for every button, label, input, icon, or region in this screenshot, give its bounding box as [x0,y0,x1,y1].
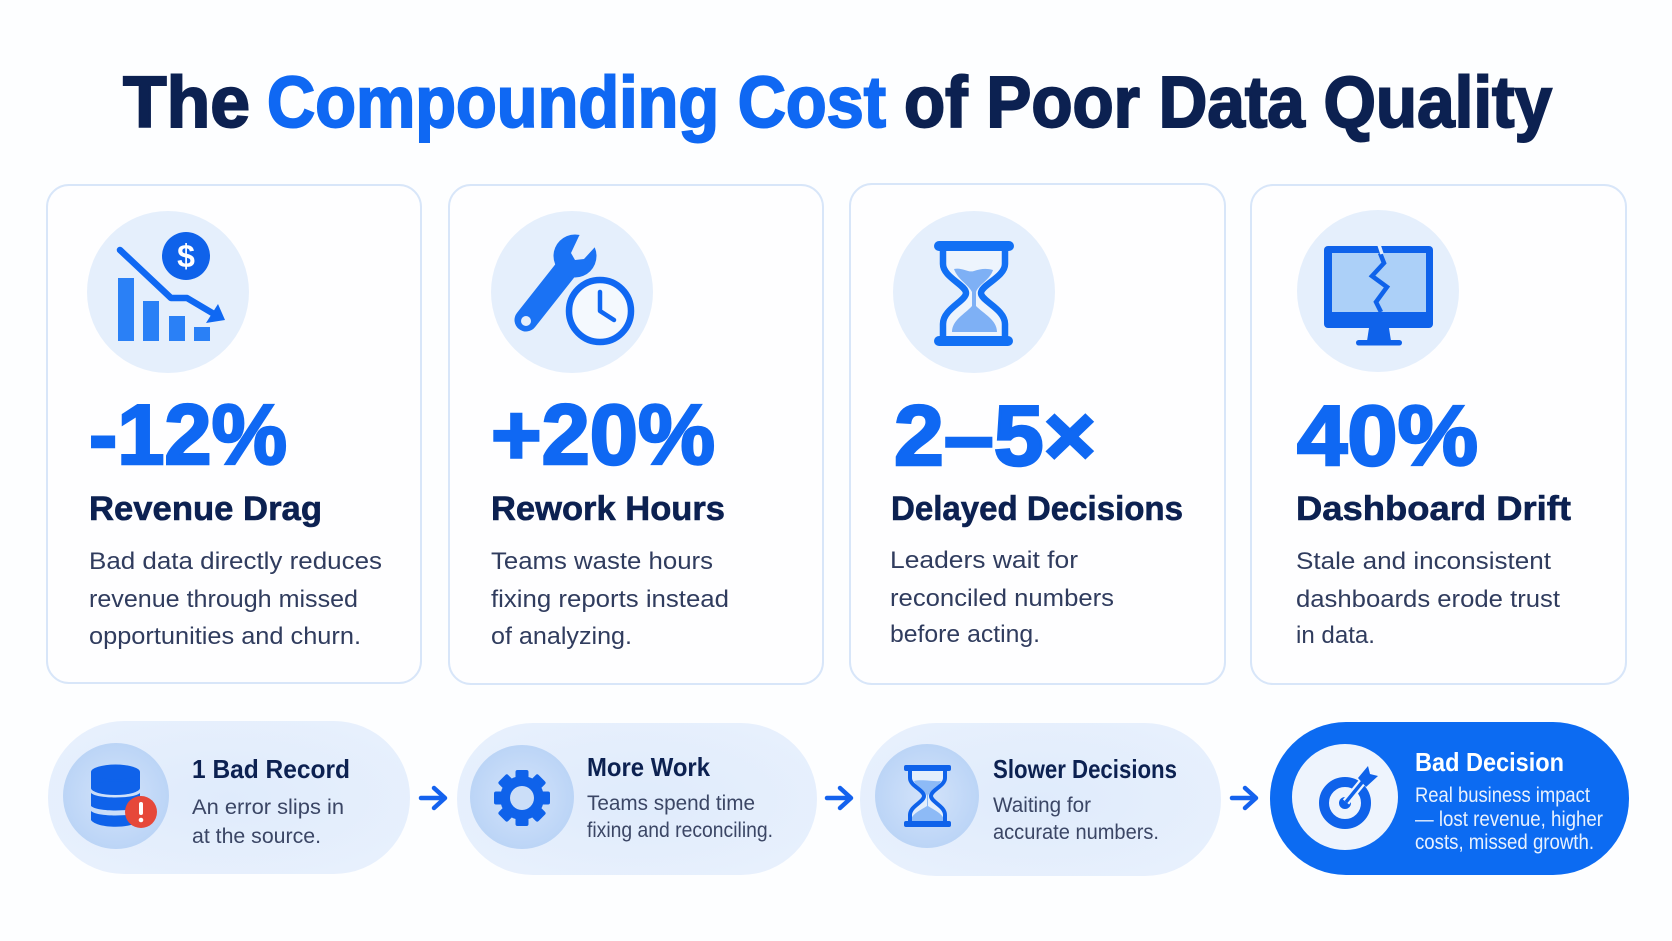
text: bad decision description [1415,784,1603,854]
text: delayed description: Leaders wait for [890,547,1078,574]
text: slower decisions description: Waiting for [993,794,1091,817]
icon: wrench and clock [491,211,653,373]
heading: dashboard drift: Dashboard Drift [1296,490,1571,528]
stat: +20%: +20% [491,388,715,483]
title: of Poor Data Quality [904,63,1552,143]
heading: delayed decisions: Delayed Decisions [891,490,1183,528]
icon: falling revenue chart [87,211,249,373]
text: dashboard description: in data. [1296,622,1375,649]
panel: dashboard drift [1251,185,1626,684]
arrow 1 [421,788,445,808]
title [123,63,1552,143]
text: delayed description: before acting. [890,621,1040,648]
text: rework description: of analyzing. [491,623,632,650]
title: Compounding Cost [267,63,886,143]
heading: slower decisions: Slower Decisions [993,754,1177,784]
text: bad record description [192,796,344,848]
icon: target with arrow [1292,744,1398,850]
text: dashboard description: dashboards erode trust [1296,586,1560,613]
heading: bad decision: Bad Decision [1415,747,1564,777]
arrow 3 [1232,788,1256,808]
text: revenue description [89,548,382,650]
text: rework description: Teams waste hours [491,548,713,575]
text: delayed description [890,547,1114,648]
step: bad decision [1270,722,1629,875]
text: slower decisions description: accurate numbers. [993,821,1159,844]
heading: 1 bad record: 1 Bad Record [192,754,350,784]
stat: 40%: 40% [1297,389,1478,484]
step: slower decisions [860,723,1221,876]
text: bad record description: at the source. [192,825,321,848]
stat: 2–5×: 2–5× [894,389,1096,484]
title: The [123,63,250,143]
text: bad decision description: — lost revenue, higher [1415,808,1603,831]
icon: database with alert [63,743,169,849]
text: revenue description: revenue through missed [89,586,358,613]
text: revenue description: opportunities and churn. [89,623,361,650]
text: delayed description: reconciled numbers [890,585,1114,612]
arrow 2 [827,788,851,808]
text: more work description: Teams spend time [587,792,755,815]
text: bad decision description: costs, missed growth. [1415,831,1594,854]
heading: revenue drag: Revenue Drag [89,490,322,528]
text: bad record description: An error slips in [192,796,344,819]
panel: rework hours [449,185,823,684]
step: 1 bad record [48,721,410,874]
text: bad decision description: Real business impact [1415,784,1590,807]
text: more work description: fixing and reconciling. [587,819,773,842]
panel: delayed decisions [850,184,1225,684]
text: dashboard description: Stale and inconsistent [1296,548,1551,575]
icon: hourglass [893,211,1055,373]
icon: gear [470,745,574,849]
text: dashboard description [1296,548,1560,649]
text: slower decisions description [993,794,1159,844]
heading: rework hours: Rework Hours [491,490,725,528]
icon: falling revenue chart: $ [177,238,195,274]
stat: -12%: -12% [89,388,287,483]
icon: small hourglass [875,744,979,848]
step: more work [457,723,817,875]
text: revenue description: Bad data directly reduces [89,548,382,575]
text: more work description [587,792,773,842]
text: rework description [491,548,729,650]
icon: cracked monitor [1297,210,1459,372]
text: rework description: fixing reports instead [491,586,729,613]
heading: more work: More Work [587,752,710,782]
panel: revenue drag [47,185,421,683]
